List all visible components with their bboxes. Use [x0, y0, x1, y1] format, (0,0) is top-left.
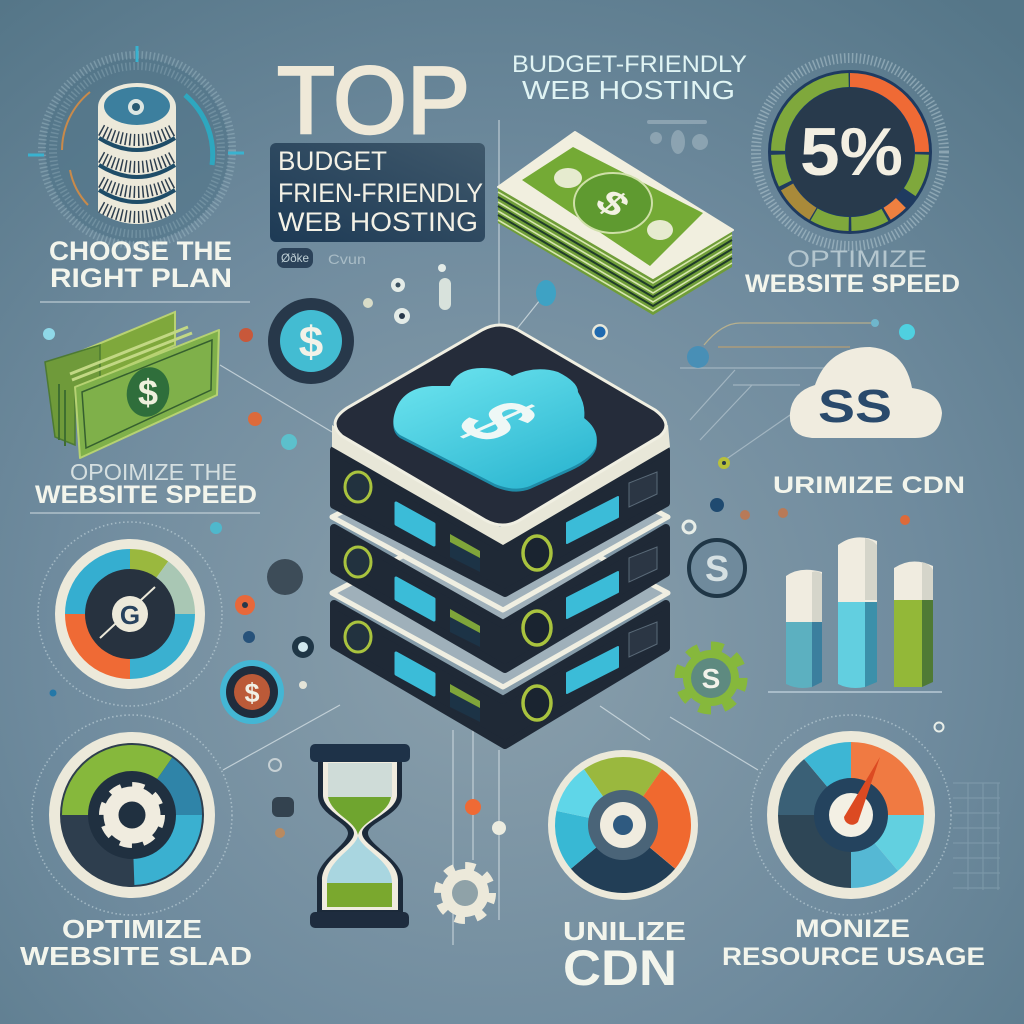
- label: choose the right plan: CHOOSE THE: [49, 236, 232, 266]
- label: opoimize the website speed: OPOIMIZE THE: [70, 459, 237, 485]
- icon: green money stack top: $: [586, 183, 639, 224]
- small caption scribbles: Øðke: [281, 251, 309, 265]
- icon: dollar gear outline: S: [705, 548, 729, 589]
- icon: green banknotes left: $: [138, 372, 158, 413]
- small caption scribbles: Cvun: [328, 251, 366, 267]
- icon: cream gear: [438, 866, 492, 920]
- icon: small gauge dollar: [220, 660, 284, 724]
- gauge: monitor: [751, 715, 951, 915]
- small caption scribbles: [277, 248, 366, 268]
- cloud with dollar: $: [432, 389, 565, 453]
- decorative dots: [43, 264, 944, 838]
- title box: [270, 143, 485, 242]
- label: unilize cdn: [563, 916, 686, 996]
- label: monize resource usage: RESOURCE USAGE: [722, 943, 985, 971]
- icon: database coin stack: [28, 46, 244, 245]
- gauge: left G: [38, 522, 222, 706]
- icon: dollar coin: $: [299, 318, 323, 367]
- label: unilize cdn: CDN: [563, 940, 677, 996]
- icon: green money stack top: [498, 132, 733, 315]
- icon: cloud with SS: [790, 347, 942, 438]
- label: opoimize the website speed: WEBSITE SPEED: [35, 481, 257, 509]
- label: choose the right plan: [49, 236, 232, 293]
- server layer 1: [332, 325, 670, 593]
- gauge: gear: [32, 715, 232, 915]
- title box: FRIEN-FRIENDLY: [278, 178, 483, 208]
- label: unilize cdn: UNILIZE: [563, 916, 686, 946]
- label: optimize website slad: OPTIMIZE: [62, 914, 202, 944]
- heading: budget-friendly web hosting: WEB HOSTING: [522, 75, 735, 105]
- donut chart: cdn: [548, 750, 698, 900]
- icon: dollar gear outline: [689, 540, 745, 596]
- faint decorative icons: [647, 120, 708, 154]
- label: monize resource usage: [722, 915, 985, 971]
- heading: budget-friendly web hosting: BUDGET-FRIENDLY: [512, 51, 747, 78]
- label: optimize website slad: [20, 914, 252, 971]
- icon: green gear: [680, 647, 742, 709]
- title box: BUDGET: [278, 146, 387, 176]
- label: optimize website speed (top right): OPTIMIZE: [787, 246, 927, 273]
- icon: green banknotes left: [45, 312, 219, 458]
- server layer 3: [332, 505, 668, 745]
- label: opoimize the website speed: [35, 459, 257, 509]
- connector lines: [30, 120, 873, 945]
- icon: dollar coin: [268, 298, 354, 384]
- central server stack: [332, 325, 670, 745]
- icon: green gear: S: [702, 663, 720, 694]
- heading: budget-friendly web hosting: [512, 51, 747, 105]
- grid decoration: [953, 783, 1000, 890]
- cloud with dollar: [393, 368, 597, 492]
- title: TOP: TOP: [277, 47, 470, 154]
- label: optimize website slad: WEBSITE SLAD: [20, 941, 252, 971]
- icon: cloud with SS: SS: [818, 380, 892, 432]
- title box: WEB HOSTING: [278, 207, 478, 237]
- label: monize resource usage: MONIZE: [795, 915, 910, 943]
- gauge: 5%: [748, 50, 952, 254]
- server layer 2: [332, 430, 668, 669]
- gauge: left G: G: [120, 600, 140, 630]
- icon: hourglass: [310, 744, 410, 928]
- label: choose the right plan: RIGHT PLAN: [50, 263, 232, 293]
- bar chart: [768, 537, 942, 692]
- label: optimize website speed (top right): WEBSITE SPEED: [745, 270, 960, 298]
- icon: small gauge dollar: $: [244, 678, 260, 708]
- label: optimize website speed (top right): [745, 246, 960, 298]
- gauge: 5%: 5%: [800, 114, 903, 190]
- label: urimize cdn: URIMIZE CDN: [773, 472, 965, 499]
